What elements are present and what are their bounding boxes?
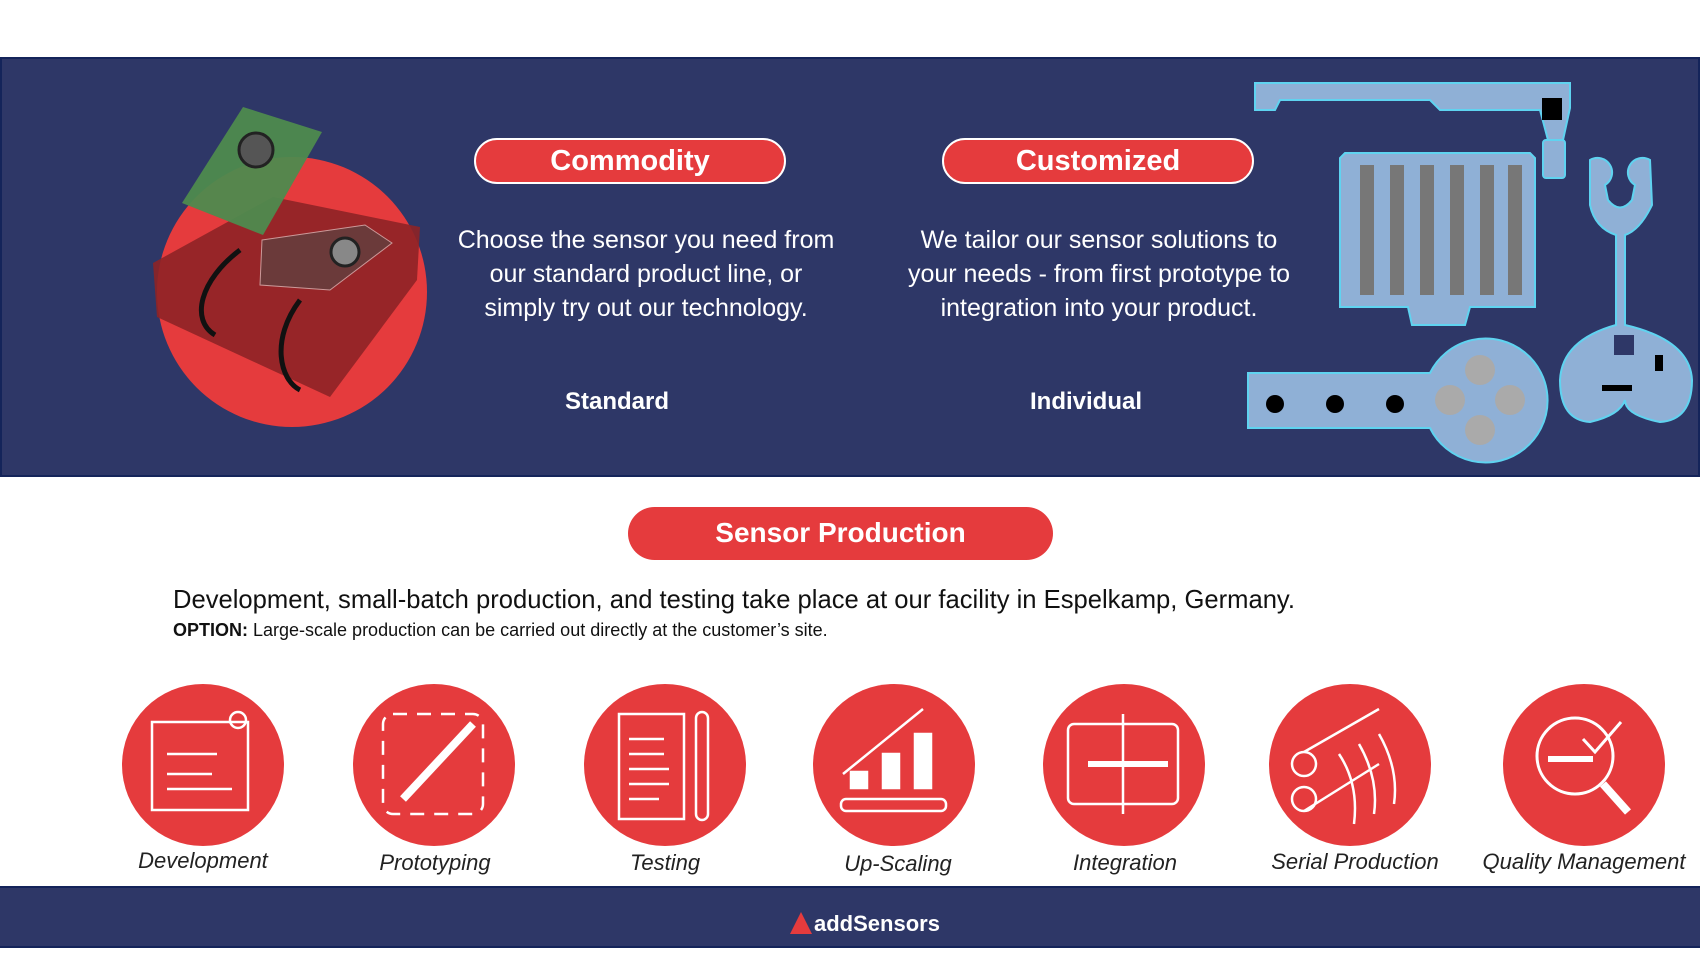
pill: Commodity: Commodity (550, 145, 710, 177)
text: commodity description: Choose the sensor you need from (458, 226, 834, 254)
text: production description: Development, small-batch production, and testing take place at our facility in Espelkamp, Germany. (173, 586, 1295, 614)
text: customized description: your needs - from first prototype to (908, 260, 1290, 288)
icon: up-scaling (813, 684, 975, 846)
label: Testing: Testing (630, 850, 700, 875)
text: customized description: integration into your product. (941, 294, 1257, 322)
pill: Customized: Customized (1016, 145, 1180, 177)
illustration: custom sensor shapes (1247, 82, 1693, 464)
icon: integration (1043, 684, 1205, 846)
icon: serial production (1269, 684, 1431, 846)
icon: development (122, 684, 284, 846)
label: Integration: Integration (1073, 850, 1177, 875)
label: Serial Production: Serial Production (1271, 849, 1439, 874)
illustration: commodity sensor on red circle (153, 107, 427, 427)
text: commodity description (458, 226, 834, 322)
text: customized description (908, 226, 1290, 322)
icon: quality management (1503, 684, 1665, 846)
text: commodity description: simply try out our technology. (484, 294, 808, 322)
label: Development: Development (138, 848, 268, 873)
text: option note: OPTION: Large-scale production can be carried out directly at the customer’s site. (173, 620, 828, 640)
pill: Sensor Production: Sensor Production (715, 517, 966, 548)
label: Standard: Standard (565, 388, 669, 415)
pill: Sensor Production (628, 507, 1053, 560)
pill: Customized (942, 138, 1254, 184)
top banner (0, 57, 1700, 477)
icon: testing (584, 684, 746, 846)
logo: addSensors: addSensors (814, 911, 940, 936)
label: Up-Scaling: Up-Scaling (844, 851, 952, 876)
footer (0, 886, 1700, 948)
text: commodity description: our standard product line, or (490, 260, 802, 288)
label: Individual: Individual (1030, 388, 1142, 415)
label: Quality Management: Quality Management (1482, 849, 1686, 874)
text: customized description: We tailor our sensor solutions to (921, 226, 1277, 254)
icon: prototyping (353, 684, 515, 846)
pill: Commodity (474, 138, 786, 184)
label: Prototyping: Prototyping (379, 850, 491, 875)
